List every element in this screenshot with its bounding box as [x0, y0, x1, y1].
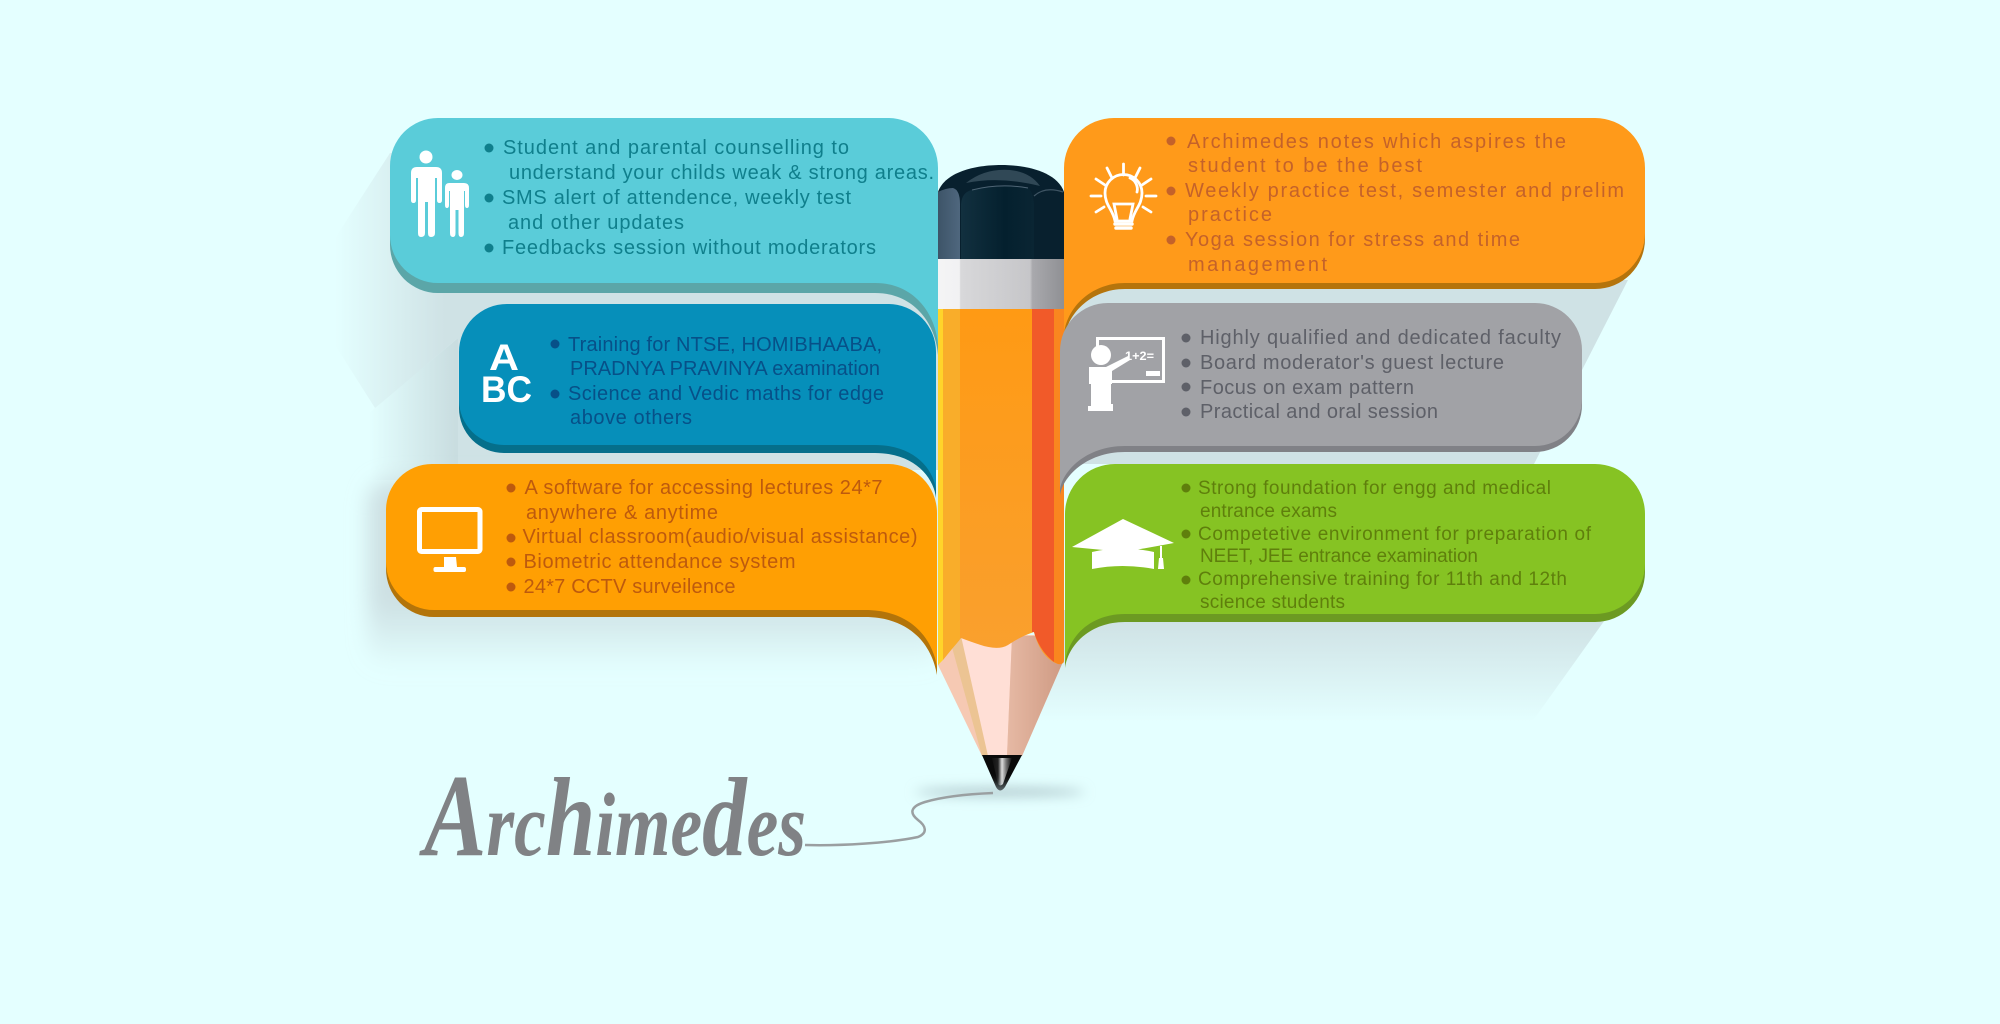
- text: entrance list: entrance exams: [1200, 501, 1337, 522]
- text: entrance list: NEET, JEE entrance examination: [1200, 546, 1478, 567]
- text: entrance list: Competetive environment for preparation of: [1198, 524, 1592, 545]
- text: counselling list: understand your childs weak & strong areas.: [509, 162, 934, 184]
- text: faculty list: Focus on exam pattern: [1200, 377, 1414, 399]
- text: counselling list: Feedbacks session without moderators: [502, 237, 876, 259]
- pencil tip ground shadow: [915, 788, 1085, 796]
- pencil silver band: [938, 259, 1064, 309]
- icon: ABC letters: [481, 337, 532, 410]
- text: software list: anywhere & anytime: [526, 502, 718, 524]
- text: faculty list: Practical and oral session: [1200, 401, 1438, 423]
- text: software list: 24*7 CCTV surveilence: [524, 576, 736, 598]
- text: exam training list: Science and Vedic maths for edge: [568, 383, 884, 405]
- text: faculty list: Highly qualified and dedicated faculty: [1200, 327, 1561, 349]
- text: notes list: student to be the best: [1188, 155, 1422, 177]
- text: faculty list: [1182, 327, 1561, 423]
- icon: teacher at board: [1088, 337, 1165, 411]
- text: counselling list: and other updates: [508, 212, 684, 234]
- text: notes list: Weekly practice test, semester and prelim: [1185, 180, 1624, 202]
- panel: faculty (gray): [1060, 303, 1582, 496]
- text: software list: Virtual classroom(audio/visual assistance): [522, 526, 918, 548]
- icon: teacher at board: 1+2=: [1125, 349, 1154, 363]
- logo signature: Archimedes: [418, 750, 806, 881]
- text: exam training list: [550, 334, 884, 429]
- text: entrance list: science students: [1200, 592, 1345, 613]
- text: notes list: Archimedes notes which aspires the: [1187, 131, 1566, 153]
- panel: exam training (blue): [459, 304, 936, 498]
- icon: parent and child: [411, 150, 469, 237]
- long shadows behind panels: [330, 153, 1628, 722]
- text: entrance list: Strong foundation for engg and medical: [1198, 478, 1551, 499]
- text: notes list: [1166, 131, 1624, 276]
- icon: ABC letters: BC: [481, 369, 532, 410]
- icon: light bulb: [1091, 164, 1156, 228]
- icon: graduation cap: [1072, 519, 1174, 569]
- pencil cap: [938, 165, 1064, 259]
- panel: notes and practice (orange right): [1064, 118, 1645, 341]
- text: notes list: practice: [1188, 204, 1272, 226]
- text: entrance list: [1182, 478, 1592, 613]
- pencil: [938, 165, 1064, 790]
- text: notes list: Yoga session for stress and time: [1185, 229, 1520, 251]
- text: faculty list: Board moderator's guest lecture: [1200, 352, 1504, 374]
- text: entrance list: Comprehensive training for 11th and 12th: [1198, 569, 1567, 590]
- text: exam training list: Training for NTSE, HOMIBHAABA,: [568, 334, 882, 356]
- text: counselling list: [484, 137, 934, 259]
- icon: ABC letters: A: [489, 337, 519, 378]
- text: counselling list: Student and parental counselling to: [503, 137, 849, 159]
- text: exam training list: PRADNYA PRAVINYA examination: [570, 358, 880, 380]
- pencil body: [938, 309, 1064, 665]
- text: counselling list: SMS alert of attendence, weekly test: [502, 187, 851, 209]
- text: software list: Biometric attendance system: [524, 551, 796, 573]
- pencil lead: [982, 755, 1022, 790]
- panel: counselling (teal): [390, 118, 938, 355]
- panel: software and classroom (orange): [386, 464, 937, 675]
- panel: entrance foundation (green): [1065, 464, 1645, 668]
- text: exam training list: above others: [570, 407, 692, 429]
- text: notes list: management: [1188, 254, 1327, 276]
- icon: monitor: [420, 510, 480, 572]
- pencil wood tip: [938, 635, 1062, 756]
- pencil stroke line: [805, 793, 993, 845]
- text: software list: A software for accessing lectures 24*7: [524, 477, 882, 499]
- text: software list: [506, 477, 918, 598]
